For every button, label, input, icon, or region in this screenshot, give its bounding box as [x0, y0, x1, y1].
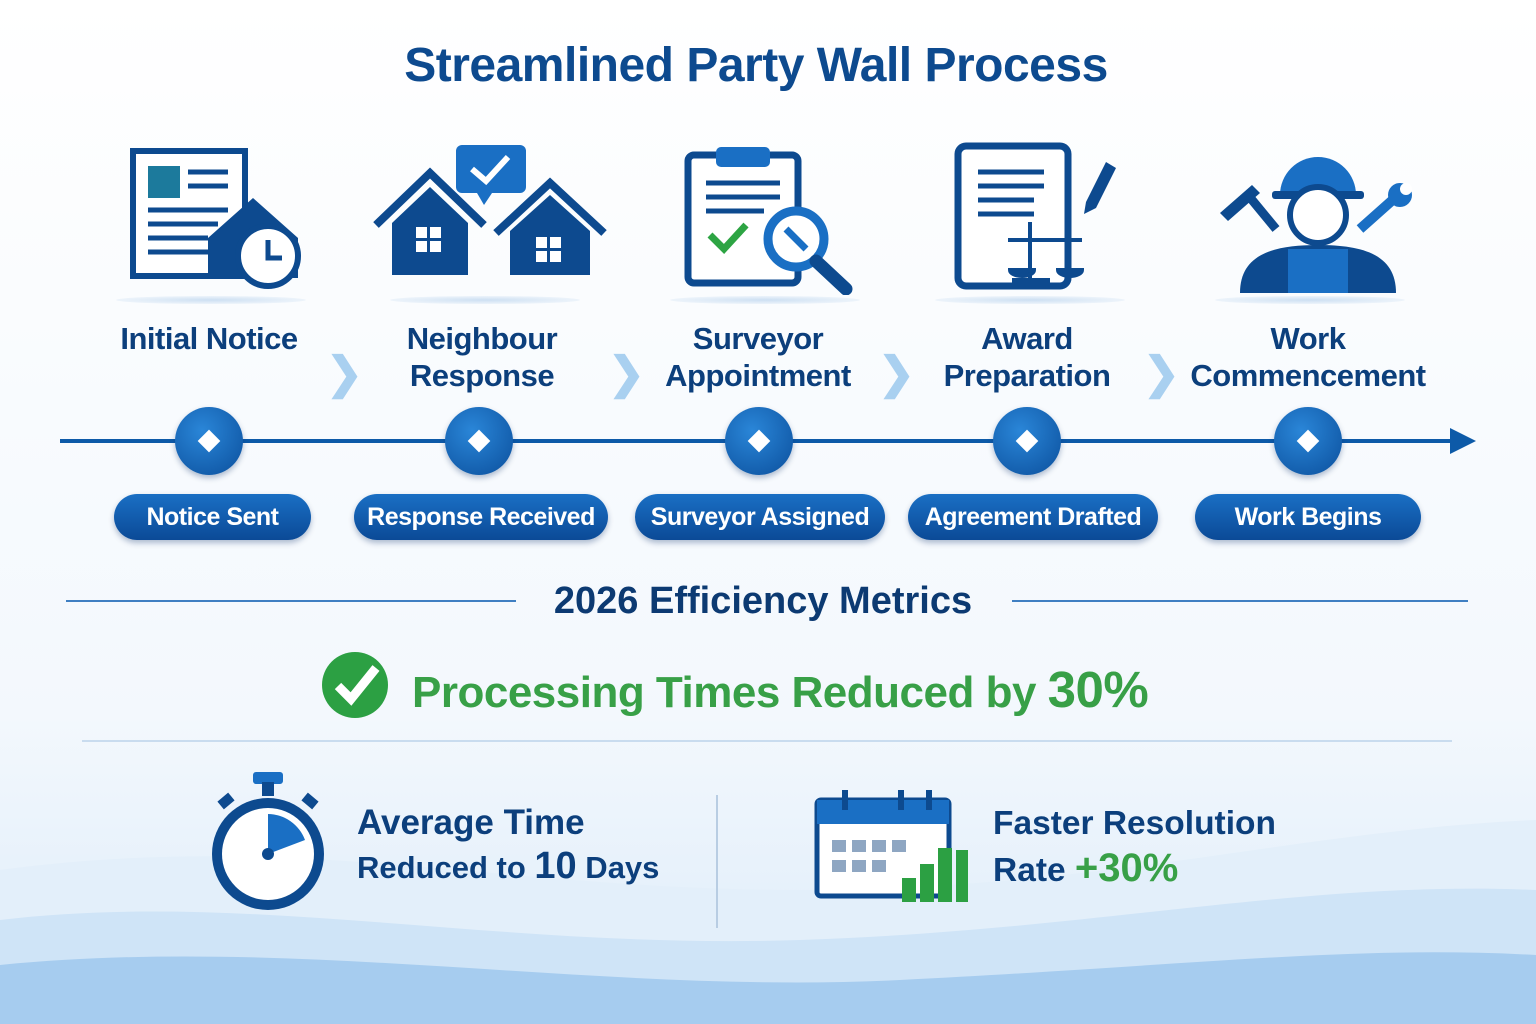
text: Commencement [1190, 358, 1426, 393]
metric: faster resolution: Faster Resolution [993, 805, 1276, 842]
title: Streamlined Party Wall Process [404, 39, 1108, 92]
text: Neighbour [407, 321, 557, 356]
icon: stopwatch [212, 772, 324, 910]
text: ❯ [608, 349, 645, 398]
metric: faster resolution [993, 805, 1276, 890]
metrics heading: 2026 Efficiency Metrics [554, 580, 972, 622]
text: Award [981, 321, 1073, 356]
headline metric: Processing Times Reduced by 30% [412, 661, 1148, 718]
text: ❯ [1143, 349, 1180, 398]
step labels: Initial Notice [120, 321, 298, 356]
icon: surveyor clipboard [684, 147, 852, 295]
text: Response [410, 358, 554, 393]
icon: calendar chart [814, 790, 968, 902]
timeline: Surveyor Assigned [651, 503, 869, 531]
icon: award scales [954, 142, 1116, 290]
timeline: Work Begins [1235, 503, 1381, 531]
milestone pills: Notice Sent [146, 503, 279, 531]
metric: average time: Reduced to 10 Days [357, 845, 659, 887]
icon: neighbour houses [373, 145, 607, 275]
chevrons: ❯ [326, 349, 363, 398]
timeline: Response Received [367, 503, 595, 531]
icon: initial notice [130, 148, 301, 289]
timeline: Agreement Drafted [925, 503, 1141, 531]
text: Work [1271, 321, 1345, 356]
milestone pills [114, 494, 311, 540]
text: ❯ [878, 349, 915, 398]
metric: average time: Average Time [357, 803, 585, 842]
text: Preparation [944, 358, 1110, 393]
timeline [60, 406, 1476, 546]
metric: average time [357, 803, 659, 887]
icon: worker [1220, 157, 1412, 293]
text: Appointment [665, 358, 851, 393]
text: Surveyor [693, 321, 823, 356]
metric: faster resolution: Rate +30% [993, 846, 1178, 890]
